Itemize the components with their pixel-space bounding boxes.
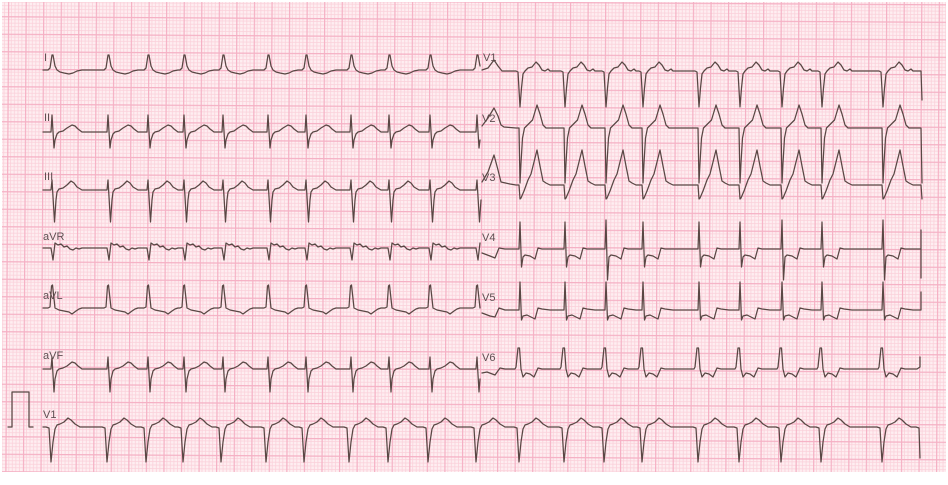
trace III bbox=[43, 180, 481, 222]
lead II bbox=[43, 112, 480, 148]
label V5: V5 bbox=[482, 292, 495, 304]
lead V1 bbox=[482, 52, 922, 107]
trace V1 bbox=[482, 60, 922, 107]
trace V5 bbox=[482, 282, 921, 320]
label I: I bbox=[44, 52, 47, 64]
label V6: V6 bbox=[482, 352, 495, 364]
trace rhythm V1 bbox=[43, 418, 920, 462]
lead V2 bbox=[482, 105, 922, 183]
trace I bbox=[43, 55, 480, 74]
trace aVL bbox=[43, 285, 480, 314]
trace II bbox=[43, 115, 480, 148]
trace V2 bbox=[482, 105, 922, 183]
label V1: V1 bbox=[483, 52, 496, 64]
lead V4 bbox=[482, 220, 921, 280]
label aVF: aVF bbox=[43, 350, 63, 362]
lead aVF bbox=[43, 350, 480, 392]
lead V3 bbox=[482, 150, 922, 199]
rhythm strip V1 bbox=[43, 409, 920, 462]
trace V3 bbox=[482, 150, 922, 199]
label III: III bbox=[44, 171, 53, 183]
lead V6 bbox=[482, 348, 920, 377]
label rhythm V1: V1 bbox=[43, 409, 56, 421]
trace V4 bbox=[482, 220, 921, 280]
calibration pulse bbox=[8, 392, 33, 427]
trace V6 bbox=[482, 348, 920, 377]
trace aVF bbox=[43, 357, 480, 392]
lead V5 bbox=[482, 282, 921, 320]
lead I bbox=[43, 52, 480, 74]
lead III bbox=[43, 171, 481, 222]
lead aVL bbox=[43, 285, 480, 314]
label II: II bbox=[44, 112, 50, 124]
label V2: V2 bbox=[482, 113, 495, 125]
lead aVR bbox=[43, 231, 480, 260]
label aVL: aVL bbox=[43, 290, 63, 302]
label V3: V3 bbox=[482, 172, 495, 184]
trace aVR bbox=[43, 243, 480, 260]
label aVR: aVR bbox=[43, 231, 64, 243]
label V4: V4 bbox=[482, 232, 495, 244]
